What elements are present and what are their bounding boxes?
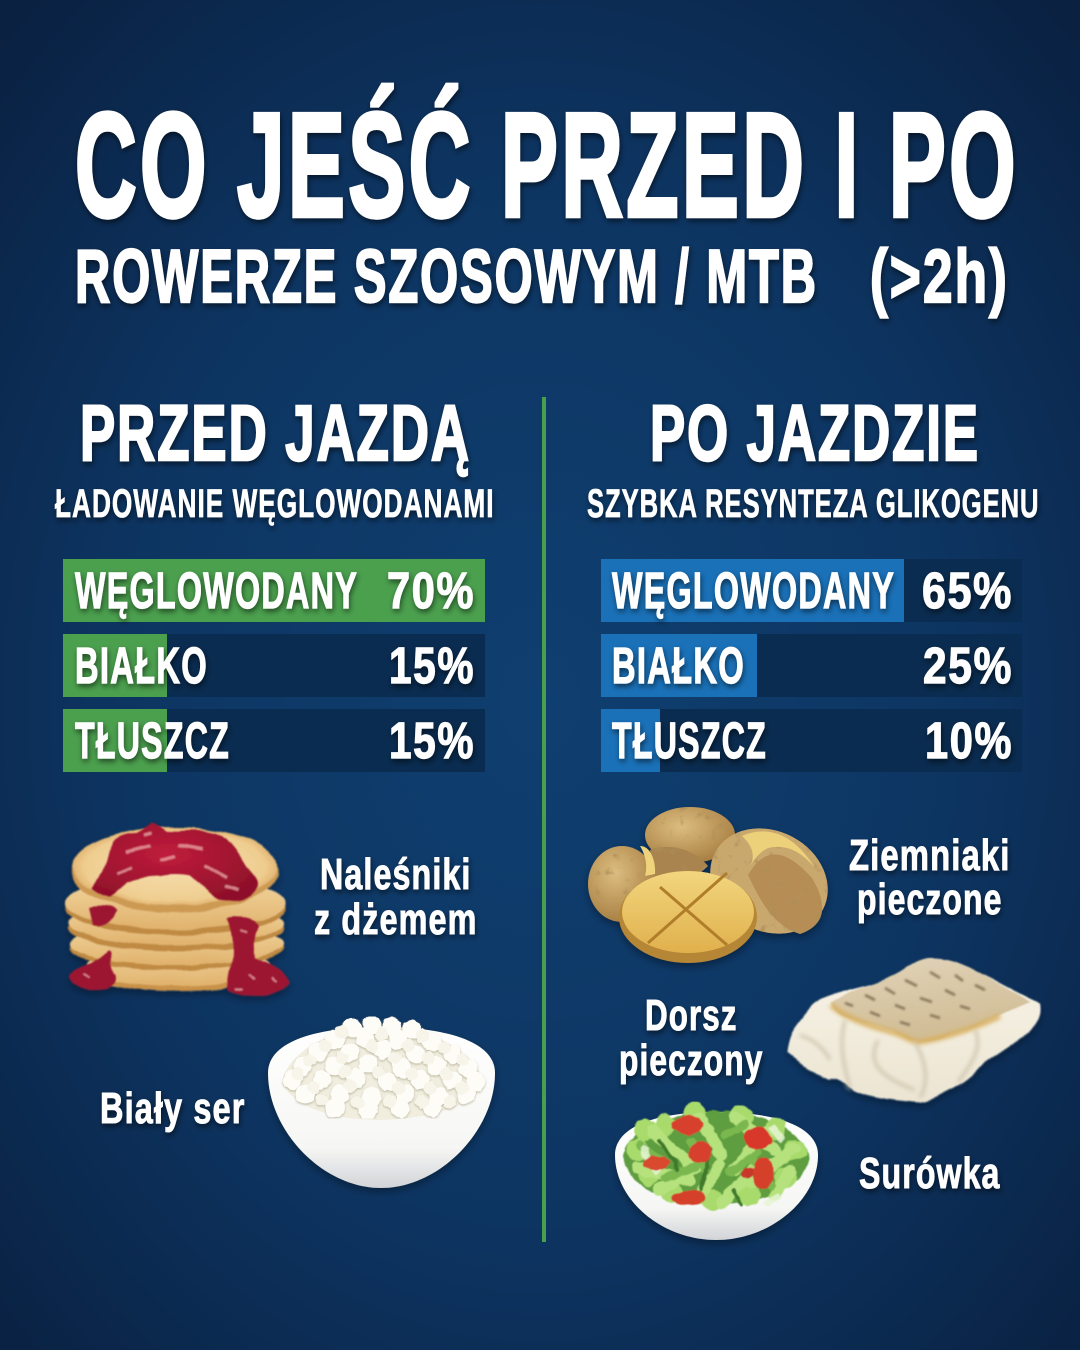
subtitle: (>2h) <box>870 234 1009 318</box>
macro bars: przed: WĘGLOWODANY <box>75 562 358 619</box>
heading: po jeździe <box>587 388 1040 526</box>
label: dorsz: Dorsz <box>645 991 738 1040</box>
label: dorsz <box>619 991 764 1085</box>
icon: baked potatoes <box>588 807 846 963</box>
macro bars: po: 10% <box>925 712 1013 769</box>
panel: przed jazdą <box>55 388 495 1188</box>
label: naleśniki: z dżemem <box>314 895 478 944</box>
label: ziemniaki <box>849 831 1010 924</box>
label: ziemniaki: pieczone <box>857 875 1002 924</box>
macro bars: przed <box>63 559 485 772</box>
heading: przed jazdą <box>55 388 494 526</box>
heading: przed jazdą: ŁADOWANIE WĘGLOWODANAMI <box>55 482 494 526</box>
macro bars: po <box>601 559 1022 772</box>
label: dorsz: pieczony <box>619 1036 764 1085</box>
icon: bowl of white cheese <box>268 1025 495 1188</box>
macro bars: po: BIAŁKO <box>612 637 745 694</box>
heading: przed jazdą: PRZED JAZDĄ <box>80 388 471 477</box>
macro bars: przed: TŁUSZCZ <box>75 712 230 769</box>
macro bars: przed: 15% <box>389 712 475 769</box>
macro bars: przed: 15% <box>389 637 475 694</box>
label: naleśniki <box>314 850 478 944</box>
title <box>75 83 1019 318</box>
label: biały ser: Biały ser <box>100 1084 246 1133</box>
macro bars: po: 65% <box>922 562 1013 619</box>
divider <box>542 397 546 1242</box>
icon: baked cod <box>787 958 1040 1102</box>
icon: pancakes with jam <box>65 823 290 996</box>
macro bars: po: TŁUSZCZ <box>612 712 767 769</box>
macro bars: po: 25% <box>923 637 1013 694</box>
label: naleśniki: Naleśniki <box>320 850 472 899</box>
macro bars: po: WĘGLOWODANY <box>612 562 895 619</box>
icon: salad bowl <box>615 1111 818 1240</box>
label: ziemniaki: Ziemniaki <box>849 831 1010 880</box>
panel: po jeździe <box>587 388 1040 1240</box>
macro bars: przed: 70% <box>387 562 475 619</box>
label: surówka: Surówka <box>859 1149 1000 1198</box>
macro bars: przed: BIAŁKO <box>75 637 208 694</box>
